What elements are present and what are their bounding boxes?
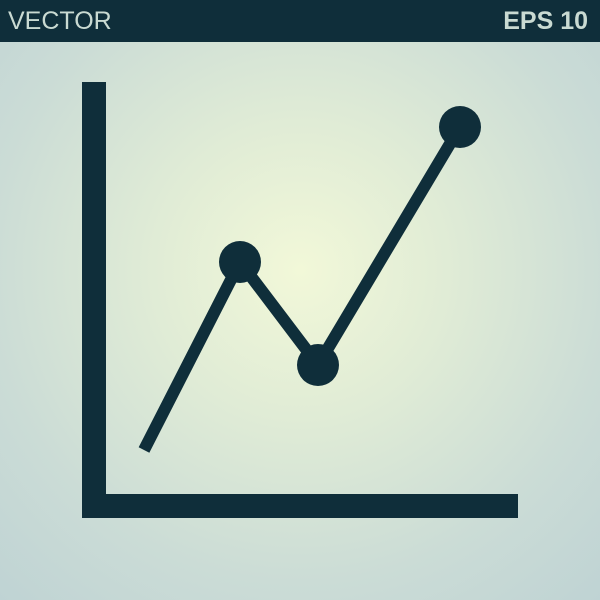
label: EPS 10: EPS 10	[503, 7, 588, 35]
label: VECTOR: VECTOR	[8, 7, 112, 35]
line graph	[144, 106, 481, 450]
axes	[82, 82, 518, 518]
header bar	[0, 0, 600, 42]
